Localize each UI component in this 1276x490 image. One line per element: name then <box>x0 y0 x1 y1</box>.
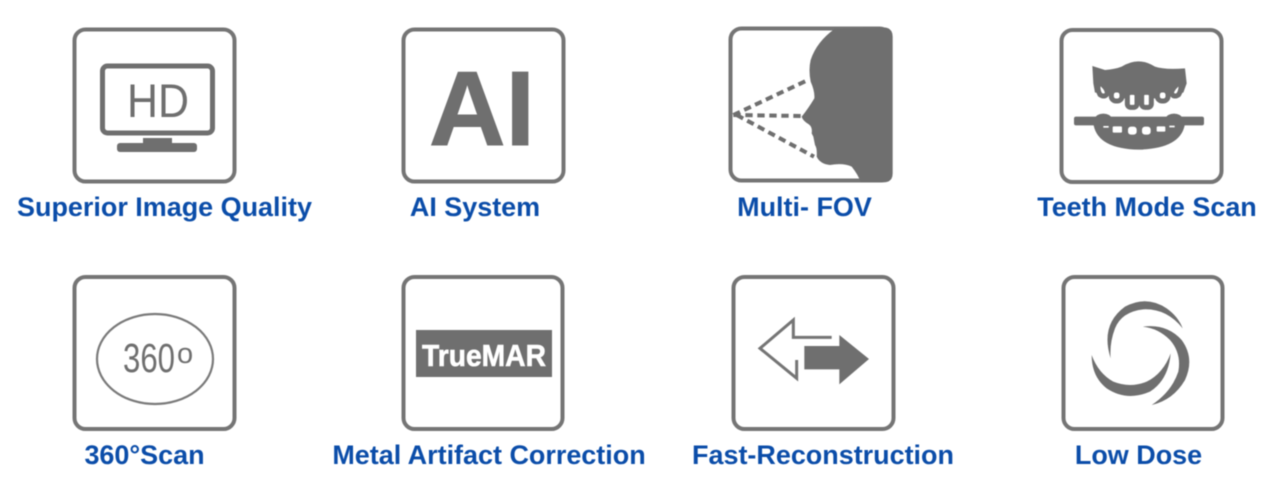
panel: superior image quality <box>17 30 312 222</box>
icon: upper and lower teeth <box>1074 61 1204 150</box>
label: Multi- FOV: Multi- FOV <box>737 192 872 222</box>
icon: TrueMAR badge <box>416 330 552 377</box>
label: Fast-Reconstruction: Fast-Reconstruction <box>692 440 954 470</box>
icon: 360 degree ellipse: o <box>177 338 193 370</box>
icon: AI letters: AI <box>429 50 535 168</box>
label: Teeth Mode Scan: Teeth Mode Scan <box>1037 192 1257 222</box>
label: Metal Artifact Correction: Metal Artifact Correction <box>332 440 646 470</box>
icon: double arrows <box>760 320 869 384</box>
icon: HD monitor <box>102 66 212 152</box>
icon: HD monitor: HD <box>127 74 189 127</box>
label: Low Dose: Low Dose <box>1075 440 1202 470</box>
label: 360°Scan: 360°Scan <box>84 440 205 470</box>
panel: metal artifact correction <box>332 277 646 470</box>
panel: low dose <box>1064 277 1222 470</box>
label: AI System: AI System <box>410 192 540 222</box>
icon: face profile with field of view <box>733 27 893 182</box>
panel: fast reconstruction <box>692 277 954 470</box>
icon: 360 degree ellipse <box>97 314 213 404</box>
panel: multi FOV <box>730 27 893 222</box>
panel: 360 scan <box>74 277 234 470</box>
panel: AI system <box>404 30 564 222</box>
icon: swirl <box>1092 301 1189 405</box>
icon: TrueMAR badge: TrueMAR <box>422 338 546 373</box>
icon: 360 degree ellipse: 360 <box>123 335 175 381</box>
panel: teeth mode scan <box>1037 30 1257 222</box>
label: Superior Image Quality: Superior Image Quality <box>17 192 312 222</box>
